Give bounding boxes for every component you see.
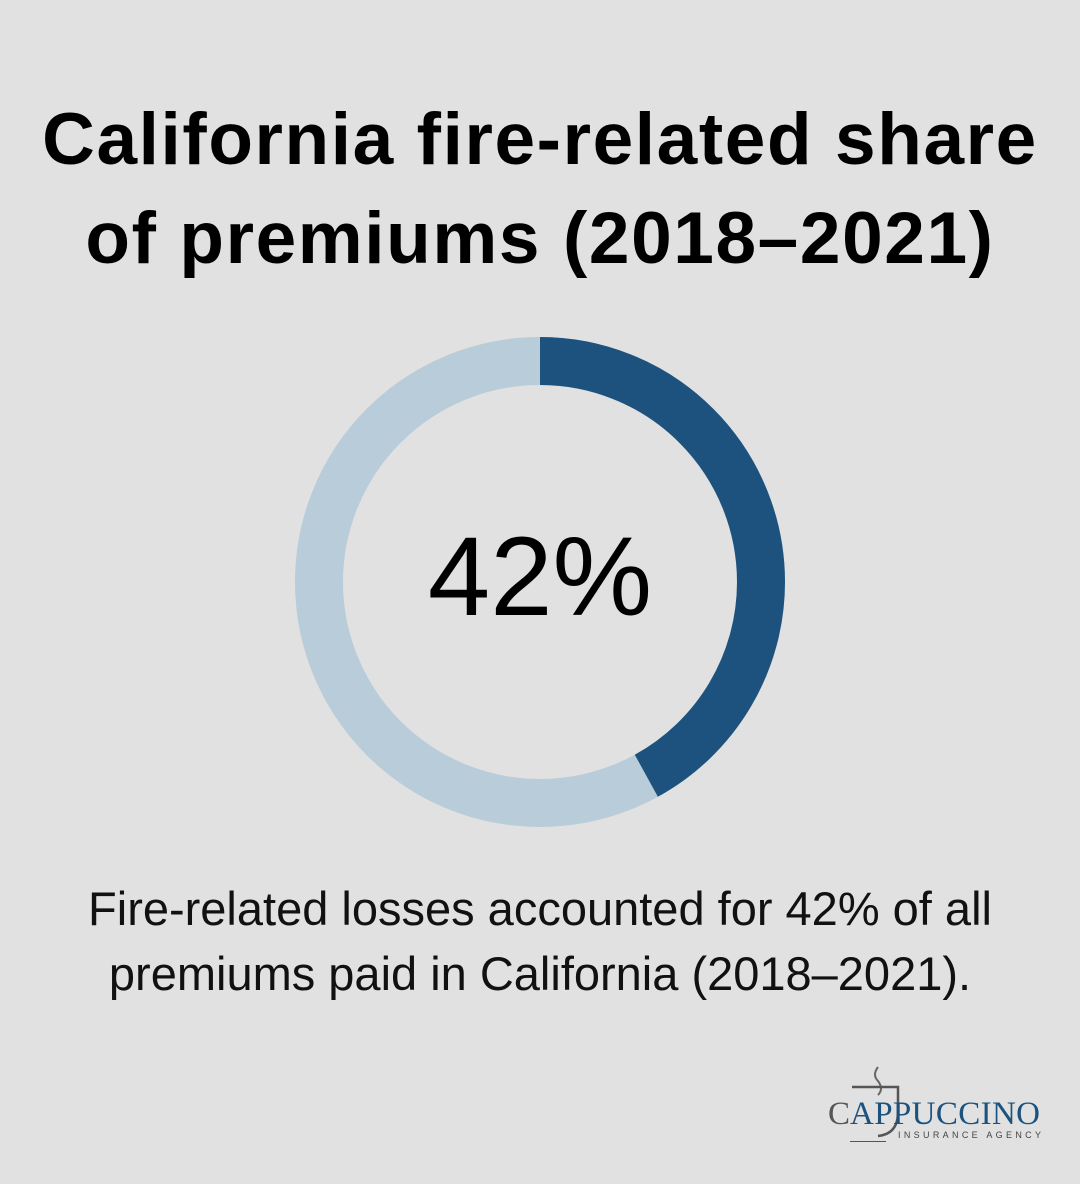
logo xyxy=(828,1066,1041,1142)
description text xyxy=(88,882,992,1000)
title: of premiums (2018–2021) xyxy=(85,198,995,279)
logo: INSURANCE AGENCY xyxy=(898,1130,1041,1140)
donut chart: 42% xyxy=(428,514,652,639)
title xyxy=(42,99,1038,279)
logo: APPUCCINO xyxy=(850,1096,1040,1132)
description text: premiums paid in California (2018–2021). xyxy=(109,947,971,1000)
title: California fire-related share xyxy=(42,99,1038,180)
description text: Fire-related losses accounted for 42% of all xyxy=(88,882,992,935)
logo: C xyxy=(828,1096,850,1132)
